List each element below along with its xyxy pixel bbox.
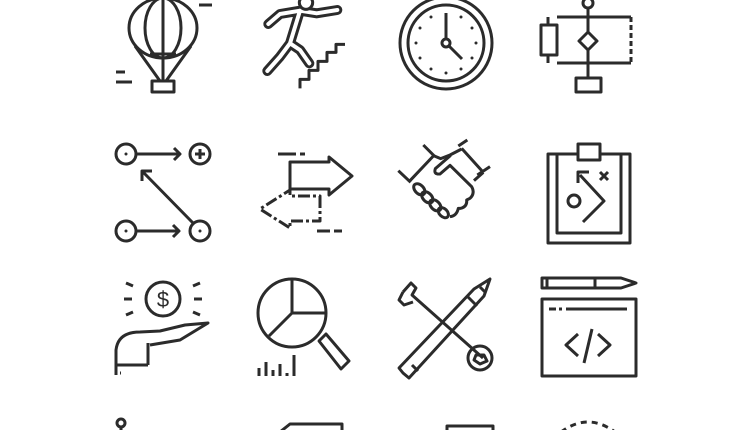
icon: partial bottom row (117, 419, 615, 430)
icon: pie chart magnifier (258, 279, 349, 376)
icon: hand with coin: $ (157, 287, 169, 312)
icon: flowchart (541, 0, 631, 92)
icon: hand with coin (116, 282, 208, 375)
icon: exchange arrows (260, 154, 352, 231)
icon: handshake (398, 140, 490, 220)
icon: process path (116, 144, 210, 241)
icon: runner on stairs (267, 0, 345, 88)
icon: clipboard strategy (548, 144, 630, 243)
icon: hot air balloon (116, 0, 212, 92)
icon: clock (400, 0, 492, 89)
icon: code window (542, 278, 636, 376)
icon: wrench and pen (399, 279, 492, 378)
